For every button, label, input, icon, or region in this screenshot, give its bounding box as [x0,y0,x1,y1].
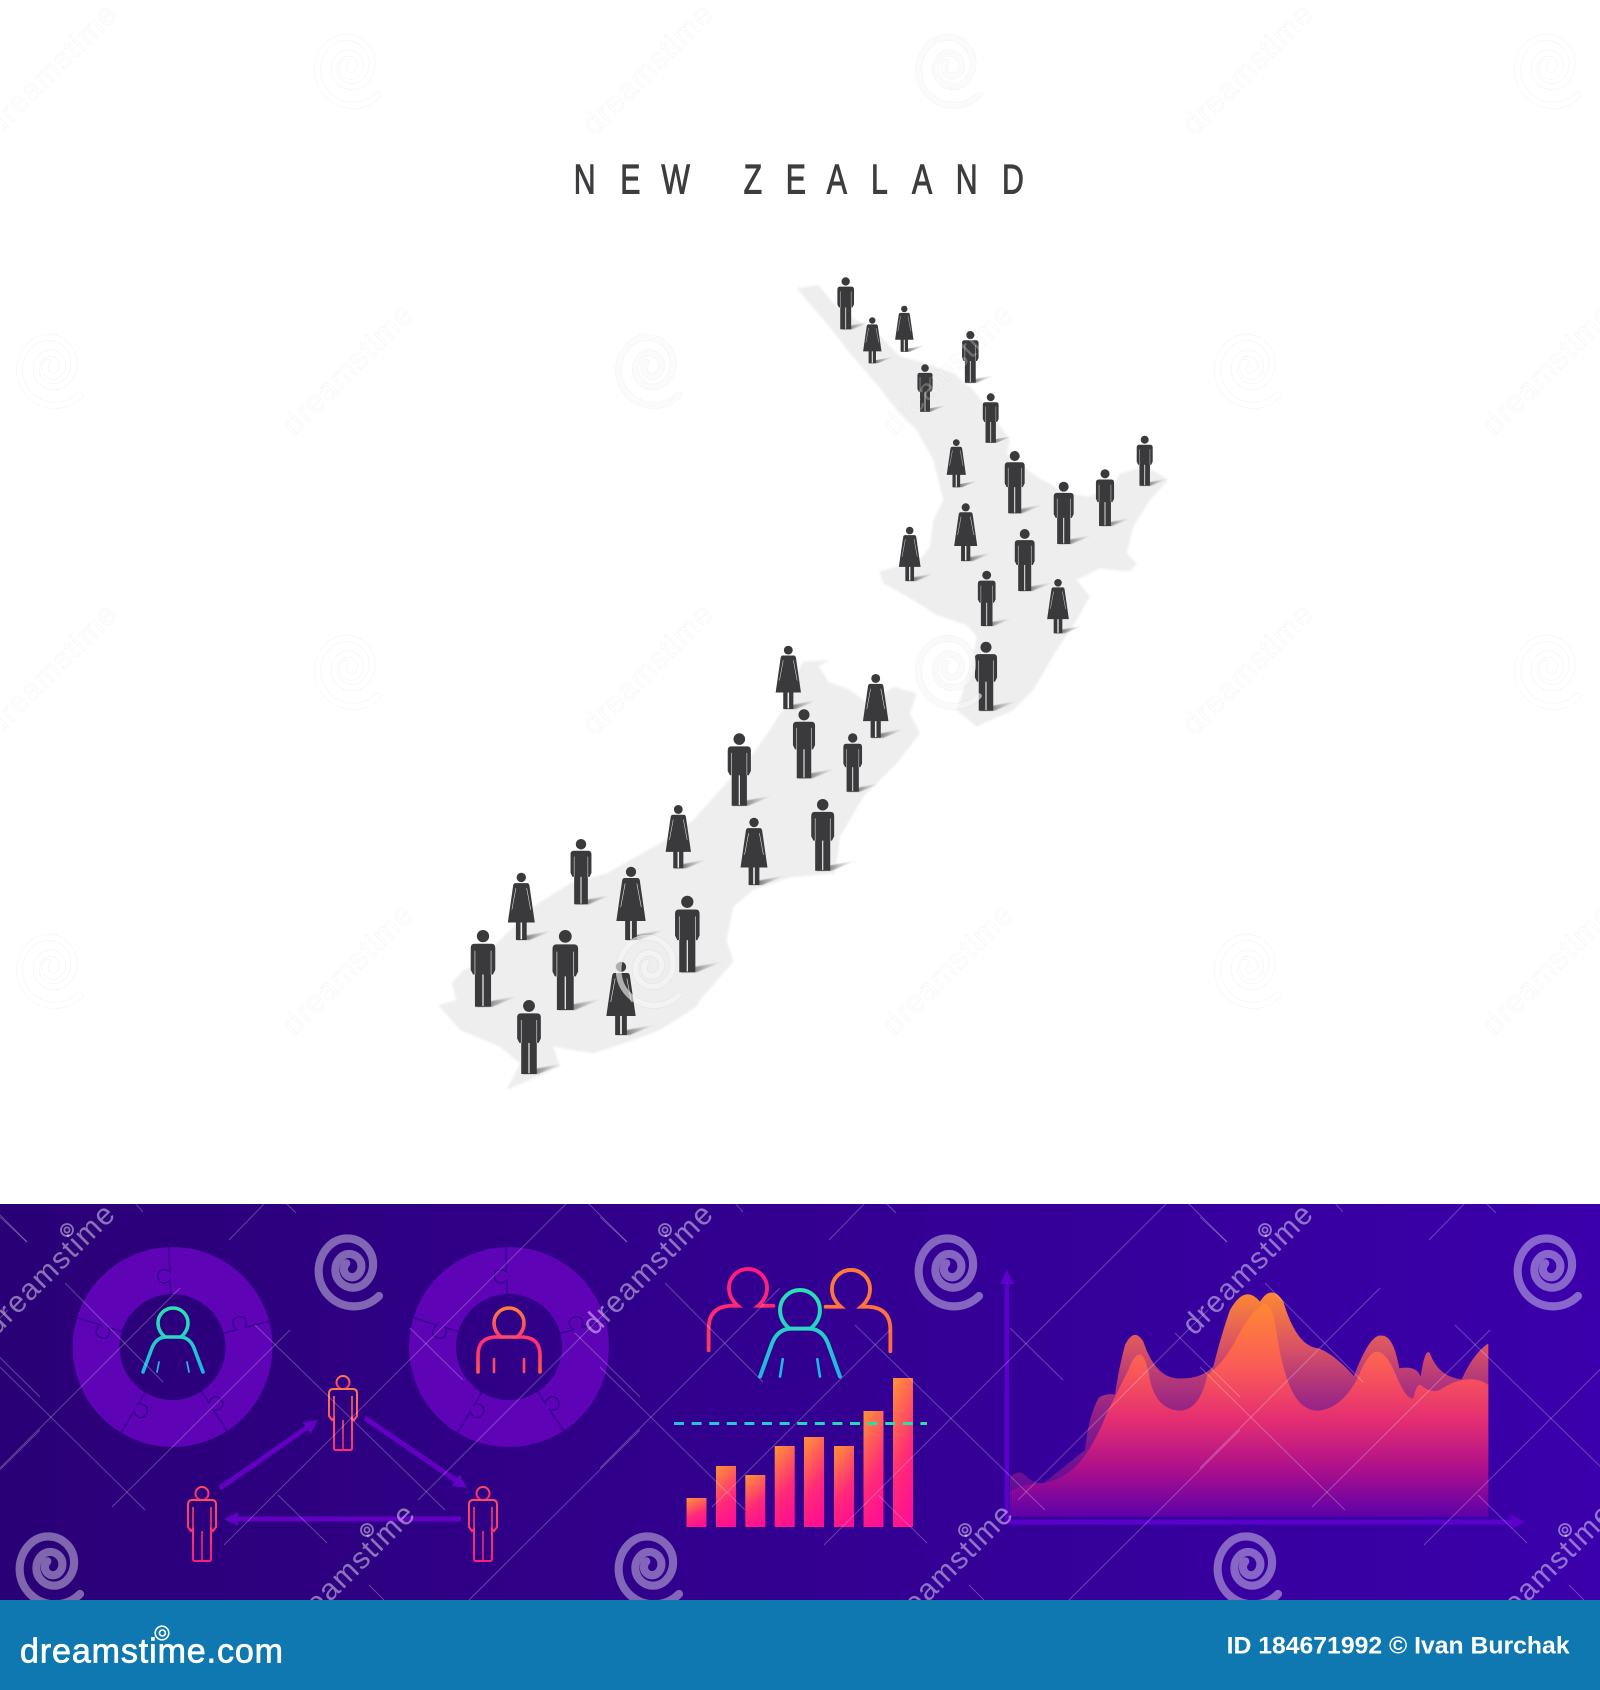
area chart [1000,1270,1525,1529]
person: south 15 [606,962,655,1035]
person: north 3 [895,306,925,352]
person: south 16 [517,1000,563,1074]
person: south 12 [675,896,723,972]
donut ring [432,1270,586,1424]
person: north 8 [1005,451,1043,513]
panel: purple band [0,1204,1600,1600]
person: south 6 [666,805,707,868]
watermark: pale text over white area [0,0,1600,1041]
donut with teal person [73,1247,269,1439]
magenta person [709,1269,773,1350]
person: north 9 [1137,436,1168,486]
watermark: pale text over white area: dreamstime [576,598,719,741]
back area [1010,1292,1488,1517]
dashed threshold line [674,1422,927,1425]
icon: teal person [143,1308,203,1372]
watermark: pale text over white area: dreamstime [876,298,1019,441]
watermark: band text: dreamstime [576,1198,719,1341]
person: north 6 [983,393,1013,443]
person: south 10 [508,873,552,940]
watermark: small spirals above band text [61,1224,1571,1536]
person: north 14 [1015,529,1053,591]
puzzle seams [410,1247,606,1439]
person: south 5 [728,733,773,806]
person: north 15 [978,571,1012,626]
person: south 2 [863,674,905,738]
map: South Island [438,660,920,1090]
person: south 8 [811,799,856,871]
person: north 7 [947,439,978,487]
donut with orange person [410,1247,606,1439]
person: north 16 [1047,579,1083,633]
watermark: pale text over white area: dreamstime [876,898,1019,1041]
teal person [760,1290,840,1376]
puzzle seams [73,1247,269,1439]
person: south 3 [793,709,836,778]
watermark: band text [0,1208,1600,1600]
footer credit: ID 184671992 © Ivan Burchak [1227,1632,1570,1660]
watermark: band text: dreamstime [876,1498,1019,1641]
person: north 2 [863,317,893,363]
watermark: band text: dreamstime [278,1498,421,1641]
donut ring [96,1270,249,1424]
person: south 14 [552,930,602,1010]
person: south 13 [471,930,518,1007]
panel: footer bar [0,1600,1600,1690]
watermark: pale text over white area: dreamstime [576,0,719,141]
icon: top small person [329,1376,357,1450]
person: north 1 [837,277,870,329]
person: south 9 [571,839,611,904]
icon: orange person [478,1308,540,1372]
arrow: top to right [365,1418,467,1488]
watermark: pale spirals over white area [5,27,1596,1020]
person: south 4 [843,733,880,792]
person: south 1 [776,646,817,709]
person: south 11 [616,867,665,940]
y axis arrow [1000,1270,1014,1524]
logo text: dreamstime.com [20,1632,283,1670]
bars [686,1378,913,1527]
arrow: left to top [220,1420,318,1488]
footer logo [20,1626,283,1670]
person: north 17 [975,642,1018,711]
person: north 5 [917,364,947,412]
person: north 12 [954,503,992,561]
watermark: pale text over white area: dreamstime [276,298,419,441]
watermark: pale text over white area: dreamstime [1176,598,1319,741]
watermark: band hatch lines [0,1203,1600,1600]
person: north 13 [899,527,935,581]
icon: group of three people [709,1269,890,1376]
watermark: band spirals [5,1228,1596,1619]
person: south 7 [741,818,785,885]
person: north 10 [1096,469,1131,526]
title: NEW ZEALAND [574,155,1024,202]
people on map [471,277,1168,1074]
map: North Island [797,285,1168,727]
x axis arrow [1005,1515,1525,1529]
watermark: pale text over white area: dreamstime [276,898,419,1041]
front area [1010,1304,1488,1517]
person: north 4 [962,331,994,383]
icon: right small person [469,1487,497,1561]
network diagram [188,1376,497,1561]
arrow: right to left [224,1512,461,1526]
watermark: pale text over white area: dreamstime [1176,0,1319,141]
icon: logo spiral [155,1626,169,1640]
watermark: band text: dreamstime [1176,1198,1319,1341]
icon: left small person [188,1487,216,1561]
person: north 11 [1054,482,1092,544]
orange person [826,1270,890,1351]
bar chart [674,1378,927,1527]
